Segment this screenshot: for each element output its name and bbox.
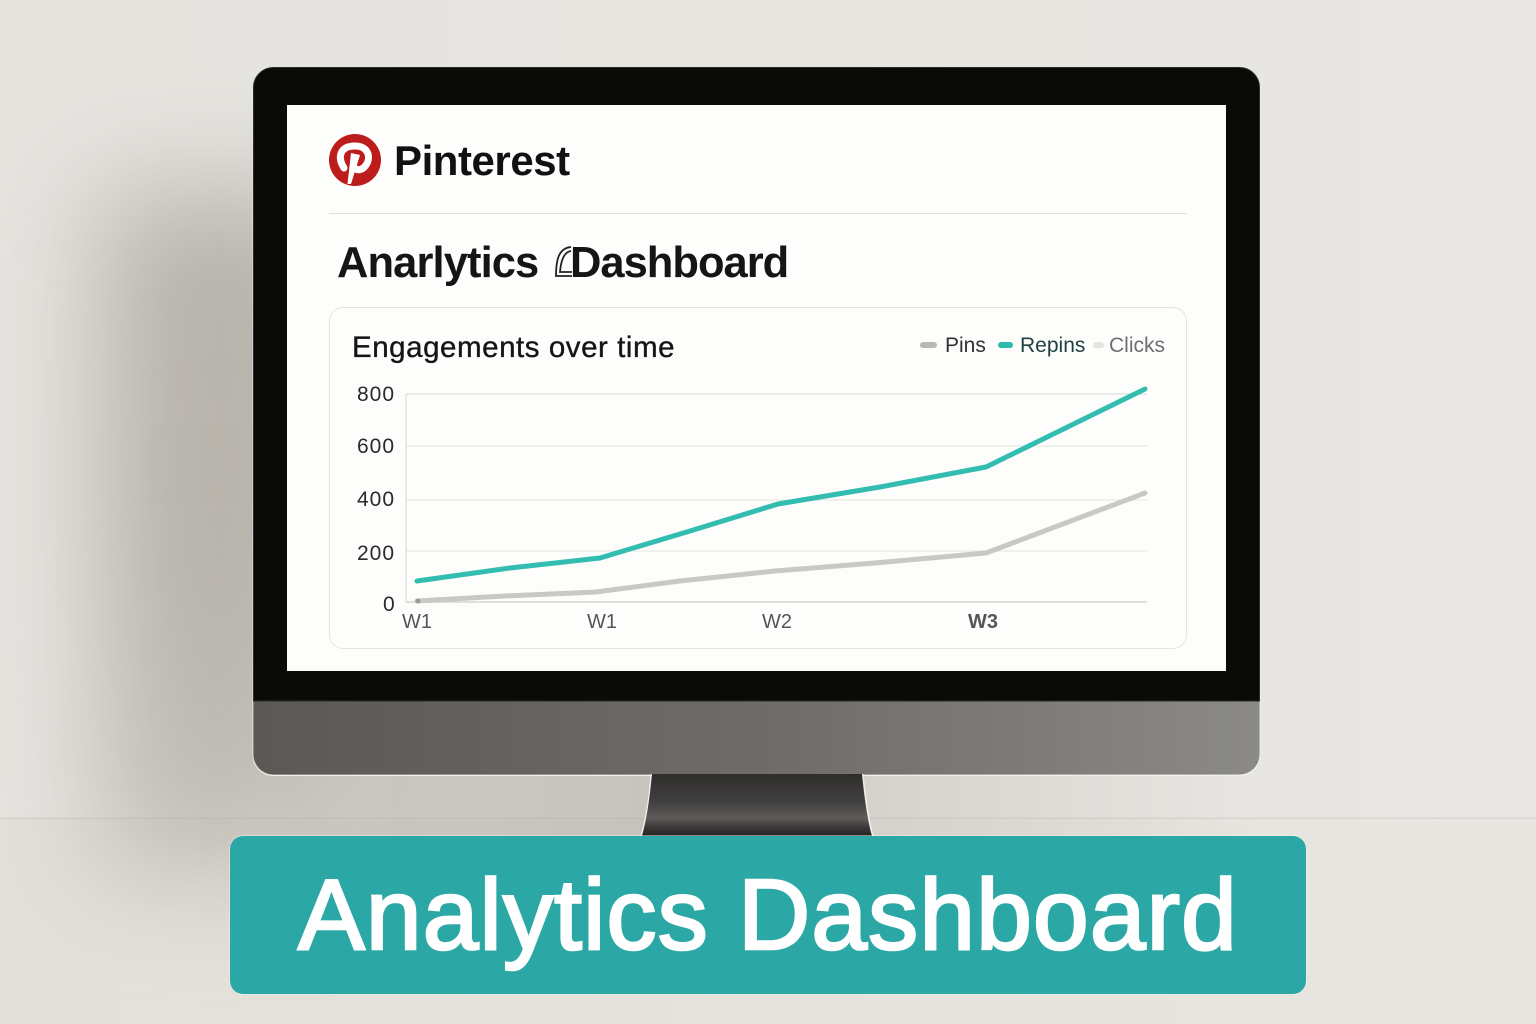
title banner [230, 836, 1306, 994]
series: pins [416, 493, 1145, 604]
Pinterest wordmark: Pinterest [394, 137, 570, 184]
legend: repins: Repins [1020, 334, 1085, 357]
x axis labels: W1 [587, 611, 617, 633]
y axis labels: 200 [357, 542, 395, 565]
x axis labels [402, 611, 998, 633]
legend: pins: Pins [945, 334, 986, 357]
legend [920, 334, 1165, 357]
legend: clicks: Clicks [1109, 334, 1165, 357]
monitor body [253, 67, 1260, 774]
line chart [357, 383, 1148, 633]
y axis labels: 400 [357, 488, 395, 511]
legend: pins [920, 334, 986, 357]
chart title: Engagements over time [352, 331, 675, 364]
dashboard heading: Dashboard [570, 239, 788, 287]
x axis labels: W3 [968, 611, 998, 633]
y axis labels: 600 [357, 435, 395, 458]
header divider [329, 213, 1187, 214]
screen [287, 105, 1226, 671]
monitor stand [640, 774, 874, 836]
series: repins [417, 389, 1145, 581]
monitor [253, 67, 1260, 775]
title banner: Analytics Dashboard [298, 859, 1238, 971]
y axis labels [357, 383, 396, 616]
heading glyph artefact [555, 246, 572, 277]
x axis labels: W1 [402, 611, 432, 633]
dashboard heading: Anarlytics [337, 239, 538, 287]
Pinterest logo [329, 134, 381, 186]
x axis labels: W2 [762, 611, 792, 633]
y axis labels: 0 [383, 593, 396, 616]
y axis labels: 800 [357, 383, 395, 406]
dashboard heading [337, 239, 788, 287]
panel: engagements chart [329, 307, 1187, 649]
icon: Pinterest P [329, 134, 381, 186]
